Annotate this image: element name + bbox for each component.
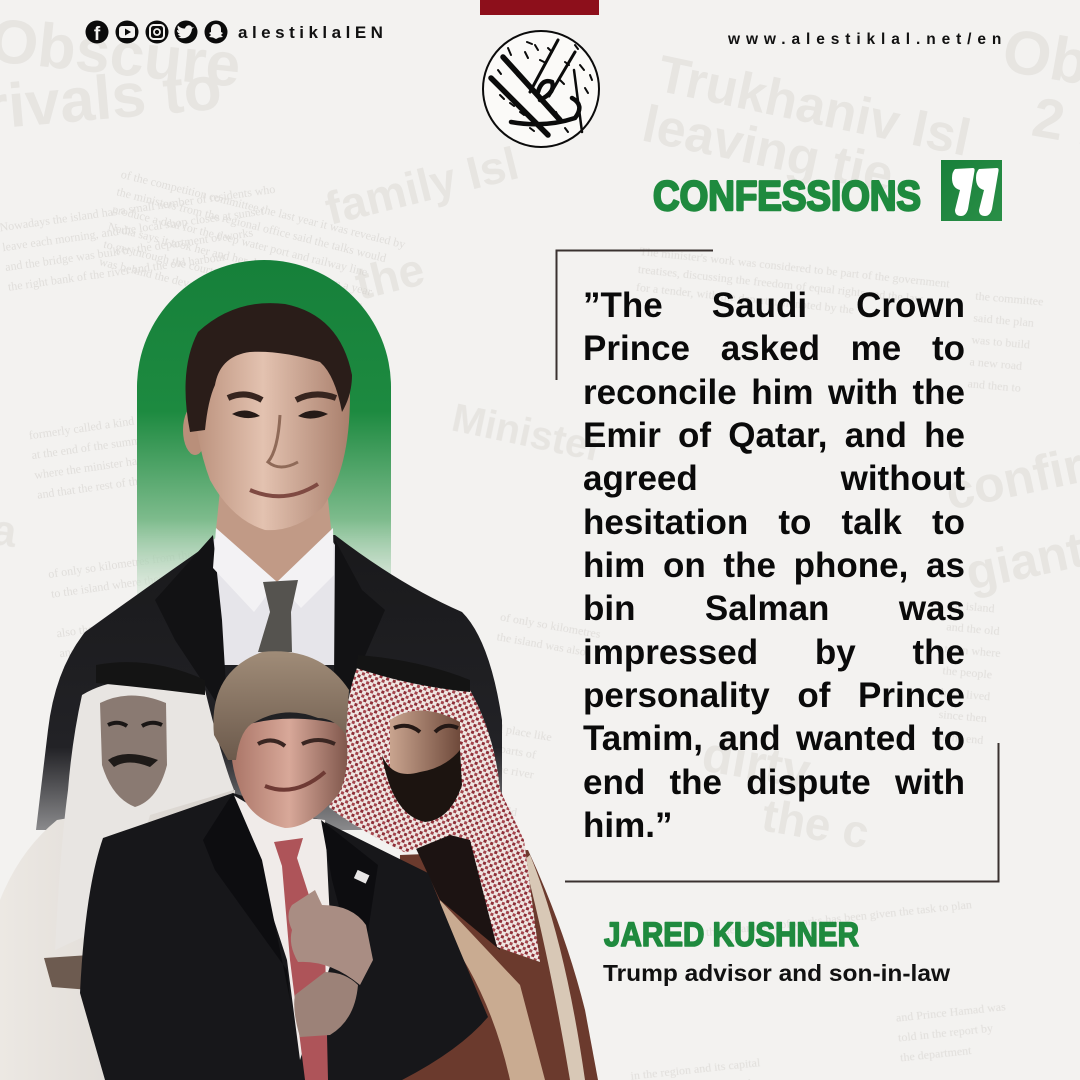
quote text: impressed by the (583, 633, 965, 672)
background: newspaper columns: the department of works has been given the task to plan (705, 897, 972, 939)
dark thobe (405, 825, 500, 950)
background: newspaper columns: have lived (940, 685, 991, 703)
face (192, 328, 350, 530)
tie (258, 580, 298, 652)
shirt (233, 795, 332, 1060)
background: newspaper headlines: dirty (698, 726, 815, 800)
background: newspaper columns: produce a deal for the deep water port and railway line (111, 202, 369, 279)
background: newspaper columns: leave each morning, and the local shop closes at sunset (1, 203, 265, 254)
forearm and watch (44, 955, 90, 990)
agal (96, 662, 205, 695)
background: newspaper columns: Nadia says it took her and her daughter more than a year (107, 219, 373, 299)
background: newspaper columns: of only so kilometres from the centre of Kyiv and (47, 534, 285, 581)
keffiyeh (329, 665, 540, 962)
background: newspaper columns: the people (942, 663, 993, 681)
background: newspaper columns: on the river (478, 758, 535, 782)
social media icons: f (94, 24, 101, 45)
black suit (80, 793, 488, 1080)
background: newspaper columns: and residents have said there has been much talk (58, 614, 291, 660)
background: newspaper columns: for a tender, with the department noted by the (635, 280, 855, 317)
background: newspaper columns: the right bank of the river and the old harbour (7, 249, 226, 294)
suit (36, 535, 502, 830)
background: newspaper columns: and Prince Hamad was (895, 999, 1007, 1025)
green arch (137, 260, 391, 620)
icon: quote marks (941, 160, 1002, 221)
background: newspaper columns: to get through the courts and the long process of appeal (102, 237, 364, 315)
background: newspaper columns: also the river bank was home to many families who (56, 592, 303, 640)
brows and eyes (228, 394, 336, 400)
heading: CONFESSIONS: CONFESSIONS (653, 172, 921, 219)
quote text: ”The Saudi Crown (583, 286, 965, 325)
background: newspaper columns: since then (938, 707, 988, 725)
nose and mouth (268, 415, 298, 467)
background: newspaper columns: the department (899, 1043, 973, 1064)
quote text: end the dispute with (583, 763, 965, 802)
agal (356, 655, 470, 692)
background: newspaper columns: at the end of the summer season they went home (31, 416, 264, 462)
face (100, 696, 167, 807)
background: newspaper columns: The minister's work was considered to be part of the government (639, 244, 951, 291)
eyes (108, 723, 162, 726)
background: newspaper columns: where the minister had spoken of their long work (33, 435, 270, 482)
quote text (583, 286, 965, 845)
right lapel (321, 820, 378, 985)
flag pin (354, 870, 369, 884)
speaker name: JARED KUSHNER (604, 916, 859, 954)
background: newspaper headlines: Minister (448, 396, 607, 471)
tie (274, 838, 328, 1080)
background: newspaper columns: to the island where they have lived and worked (50, 555, 276, 601)
quote text: personality of Prince (583, 676, 965, 715)
quote text: Prince asked me to (583, 329, 965, 368)
face (390, 710, 460, 820)
hair (213, 651, 349, 760)
background: newspaper headlines: leaving tie (638, 95, 898, 205)
background: newspaper headlines (0, 6, 1080, 858)
background: newspaper columns: was behind the development Ukraine, and the Kyiv leaders (98, 254, 377, 337)
quote text: hesitation to talk to (583, 503, 965, 542)
lower hand (294, 972, 358, 1037)
portrait: Mohammed bin Salman (329, 655, 598, 1080)
social media icons (86, 20, 228, 45)
brown robe (395, 850, 598, 1080)
background: newspaper columns: at the end (936, 729, 984, 747)
quote frame: top-left bracket (556, 250, 713, 380)
quote text: bin Salman was (583, 589, 965, 628)
white robe (0, 790, 240, 1080)
quote text: him on the phone, as (583, 546, 965, 585)
background: newspaper headlines: the c (758, 789, 873, 858)
left lapel (203, 793, 290, 1000)
background: newspaper columns: was to build (971, 332, 1031, 351)
brows (394, 726, 458, 732)
website url: www.alestiklal.net/en (727, 31, 1007, 48)
background: newspaper columns: and the old (946, 619, 1000, 638)
hair (186, 303, 352, 432)
background: newspaper columns: of only so kilometres (499, 610, 602, 641)
shirt (213, 525, 336, 665)
collar (213, 528, 334, 612)
background: newspaper columns: and that the rest of the town was in full support (36, 456, 263, 502)
background: newspaper headlines: Trukhaniv Isl (653, 45, 976, 168)
background: newspaper columns: a new road (969, 354, 1023, 373)
background: newspaper columns: said the plan (973, 311, 1034, 330)
background: newspaper columns: the ministers from the regional office said the talks would (115, 184, 388, 265)
head scarf (55, 679, 234, 950)
background: newspaper columns: and the bridge was built by the department of works (4, 225, 254, 274)
quote text: agreed without (583, 459, 965, 498)
background: newspaper columns: formerly called a kind of place for the residents (28, 397, 256, 442)
background: newspaper columns: the parts of (482, 738, 537, 762)
background: newspaper columns: and then to (967, 376, 1021, 395)
background: newspaper columns: treatises, discussing the freedom of equal rights and the law (637, 262, 924, 306)
background: newspaper columns: town where (944, 641, 1001, 660)
background: newspaper columns: of the competition committee the last year it was revealed by (120, 167, 407, 251)
top red bar (480, 0, 599, 15)
background: newspaper columns: and place like (485, 719, 553, 744)
quote text: reconcile him with the (583, 373, 965, 412)
background: newspaper columns: Nowadays the island has a small number of residents who (0, 182, 276, 234)
background: newspaper columns: the island was also (496, 629, 587, 659)
quote text: him.” (583, 806, 672, 845)
moustache (108, 754, 158, 767)
social handle: alestiklalEN (238, 23, 387, 42)
upper hand (288, 890, 373, 985)
background: newspaper headlines: the (350, 243, 429, 310)
mouth (265, 772, 325, 790)
beard (382, 750, 462, 822)
neck (216, 470, 332, 582)
eyes (258, 740, 335, 746)
background: newspaper columns: told in the report by (897, 1021, 994, 1045)
face (231, 719, 347, 828)
portrait: Jared Kushner (36, 303, 502, 830)
portrait: Emir of Qatar (0, 662, 240, 1080)
background: newspaper headlines: family Isl (320, 137, 523, 235)
lapels (155, 535, 385, 720)
background: newspaper columns: in recent weeks about the future of the district (61, 635, 282, 680)
quote frame: bottom-right bracket (565, 743, 998, 882)
speaker role: Trump advisor and son-in-law (603, 960, 950, 986)
background: newspaper columns: the committee (975, 289, 1044, 309)
ears (183, 405, 207, 455)
background: newspaper columns: the island (948, 597, 995, 615)
gold trim (440, 900, 545, 1080)
portrait: Donald Trump (80, 651, 488, 1080)
quote text: Tamim, and wanted to (583, 719, 965, 758)
quote text: Emir of Qatar, and he (583, 416, 965, 455)
logo: calligraphy roundel (483, 31, 599, 147)
background: newspaper columns: to the old (471, 798, 518, 819)
